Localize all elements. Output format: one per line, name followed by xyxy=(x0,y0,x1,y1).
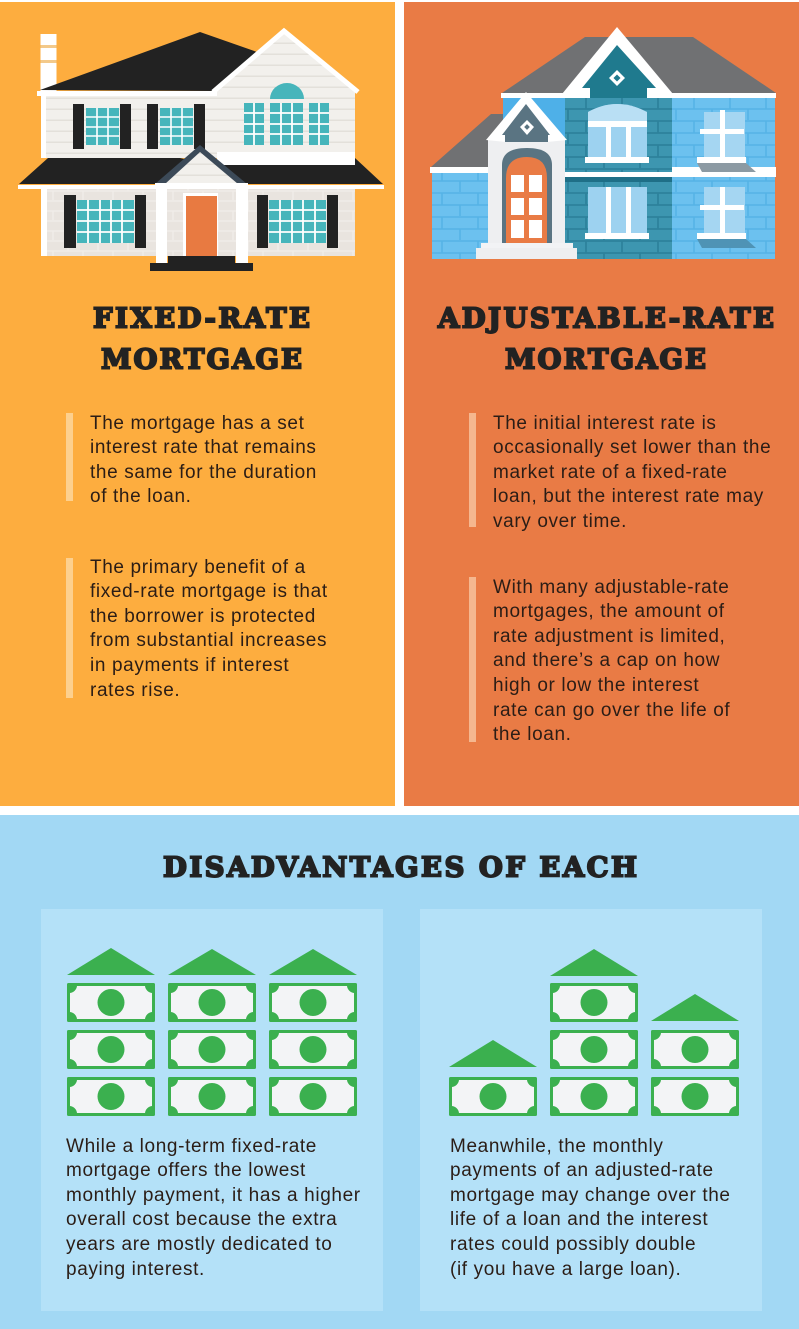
text: adjustable point one: The initial interest rate is xyxy=(493,412,717,434)
text: fixed-rate disadvantage: monthly payment, it has a higher xyxy=(66,1185,361,1206)
text: fixed point one: The mortgage has a set xyxy=(90,412,305,434)
text: adjustable point two xyxy=(493,576,730,745)
panel: adjustable-rate background xyxy=(404,2,799,806)
text: adjustable-rate disadvantage: mortgage may change over the xyxy=(450,1185,731,1206)
accent bar: fixed point two xyxy=(66,558,73,698)
text: adjustable point one: occasionally set lower than the xyxy=(493,437,771,458)
text: fixed-rate disadvantage: While a long-term fixed-rate xyxy=(66,1136,317,1156)
text: adjustable point two: mortgages, the amount of xyxy=(493,601,725,622)
heading: adjustable-rate mortgage: ADJUSTABLE-RATE xyxy=(437,302,774,334)
panel: fixed-rate background xyxy=(0,2,395,806)
text: adjustable-rate disadvantage: life of a loan and the interest xyxy=(450,1209,708,1230)
text: adjustable point one xyxy=(493,412,771,532)
text: fixed point one: the same for the duration xyxy=(90,462,317,483)
text: adjustable point two: and there’s a cap on how xyxy=(493,650,720,671)
text: fixed point one: of the loan. xyxy=(90,486,192,507)
text: fixed point one xyxy=(90,412,317,507)
card: adjustable-rate disadvantage xyxy=(420,909,762,1311)
text: adjustable point one: market rate of a fixed-rate xyxy=(493,462,728,483)
text: fixed point two: rates rise. xyxy=(90,680,180,701)
panel: disadvantages background xyxy=(0,815,799,1329)
illustration: white siding house xyxy=(18,31,384,271)
text: fixed point two xyxy=(90,556,328,701)
chart: adjustable-rate payment stacks xyxy=(449,949,739,1116)
heading: fixed-rate mortgage xyxy=(93,302,310,376)
text: adjustable point two: With many adjustable-rate xyxy=(493,576,729,598)
heading: adjustable-rate mortgage: MORTGAGE xyxy=(505,344,706,376)
text: fixed point two: fixed-rate mortgage is that xyxy=(90,581,328,602)
heading: fixed-rate mortgage: MORTGAGE xyxy=(101,344,302,376)
accent bar: fixed point one xyxy=(66,413,73,501)
text: adjustable-rate disadvantage: rates could possibly double xyxy=(450,1234,696,1255)
heading: fixed-rate mortgage: FIXED-RATE xyxy=(93,302,310,334)
text: fixed-rate disadvantage xyxy=(66,1136,361,1280)
text: fixed point two: in payments if interest xyxy=(90,655,289,676)
heading: disadvantages of each: DISADVANTAGES OF EACH xyxy=(163,852,637,884)
text: fixed-rate disadvantage: mortgage offers the lowest xyxy=(66,1160,306,1181)
text: adjustable-rate disadvantage: Meanwhile, the monthly xyxy=(450,1136,663,1156)
text: fixed-rate disadvantage: years are mostly dedicated to xyxy=(66,1234,332,1255)
text: fixed point two: the borrower is protected xyxy=(90,606,316,627)
text: fixed-rate disadvantage: overall cost because the extra xyxy=(66,1209,337,1230)
text: fixed point two: from substantial increases xyxy=(90,630,327,651)
illustration: blue brick house xyxy=(430,27,776,259)
text: adjustable point two: rate can go over the life of xyxy=(493,700,730,721)
text: adjustable point one: loan, but the interest rate may xyxy=(493,486,764,507)
text: fixed point one: interest rate that remains xyxy=(90,437,317,458)
text: adjustable point two: the loan. xyxy=(493,724,572,745)
card: fixed-rate disadvantage xyxy=(41,909,383,1311)
text: fixed-rate disadvantage: paying interest. xyxy=(66,1259,205,1280)
text: adjustable-rate disadvantage: payments of an adjusted-rate xyxy=(450,1160,714,1181)
heading: adjustable-rate mortgage xyxy=(437,302,774,376)
text: adjustable point two: high or low the interest xyxy=(493,675,699,696)
text: adjustable point two: rate adjustment is limited, xyxy=(493,626,725,647)
text: fixed point two: The primary benefit of a xyxy=(90,556,306,578)
accent bar: adjustable point two xyxy=(469,577,476,742)
text: adjustable-rate disadvantage xyxy=(450,1136,731,1280)
accent bar: adjustable point one xyxy=(469,413,476,527)
text: adjustable-rate disadvantage: (if you have a large loan). xyxy=(450,1259,681,1280)
chart: fixed-rate payment stacks xyxy=(67,948,357,1116)
text: adjustable point one: vary over time. xyxy=(493,511,627,532)
